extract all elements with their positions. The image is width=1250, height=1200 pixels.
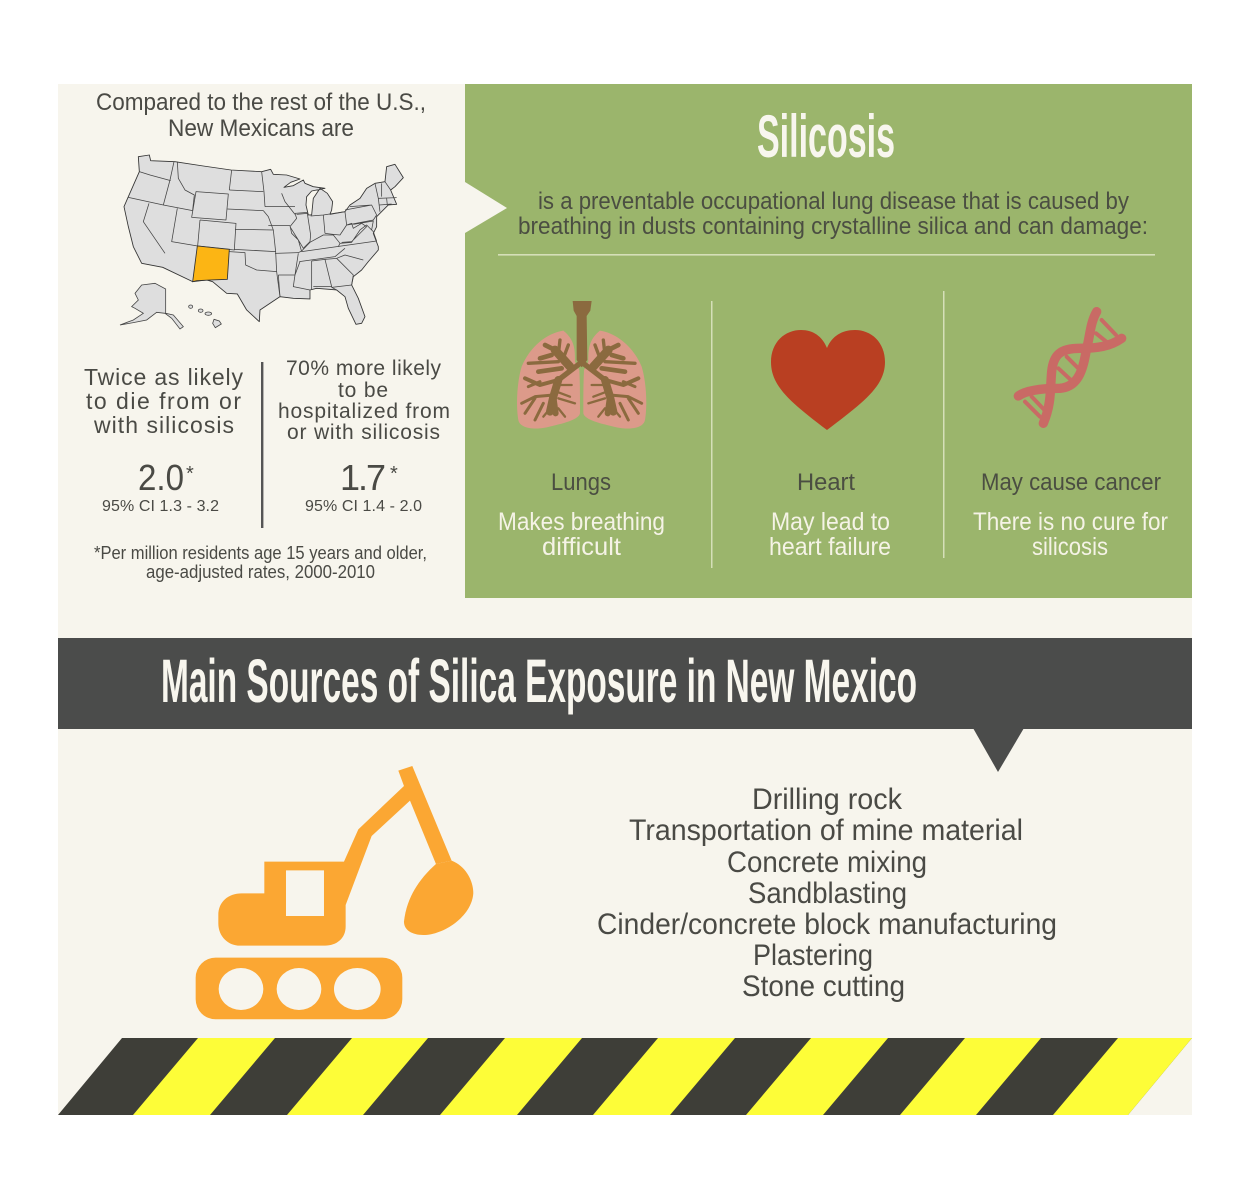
label: heart: May lead to: [771, 508, 890, 536]
cream background panel: [58, 84, 1192, 1115]
list: sources of exposure: Transportation of mine material: [629, 814, 1023, 847]
stat: 70% more likely: *: [390, 463, 398, 485]
stat: 70% more likely: [278, 357, 450, 515]
label: heart: Heart: [797, 469, 855, 496]
icon: lungs: [517, 301, 646, 428]
stat: twice as likely: Twice as likely: [84, 364, 244, 390]
list: sources of exposure: Cinder/concrete block manufacturing: [597, 908, 1057, 941]
stat: 70% more likely: 1.7: [340, 457, 386, 498]
banner: main sources: [58, 638, 1192, 772]
hazard stripes: [58, 1038, 1192, 1115]
stat: twice as likely: 2.0: [138, 457, 184, 498]
divider between stats: [261, 362, 263, 528]
label: heart: heart failure: [769, 533, 891, 561]
stat: twice as likely: to die from or: [86, 388, 241, 414]
label: lungs: [498, 469, 665, 561]
stat: twice as likely: with silicosis: [93, 412, 234, 438]
label: lungs: Makes breathing: [498, 508, 665, 536]
stat: 70% more likely: to be: [338, 379, 388, 402]
label: lungs: Lungs: [551, 469, 611, 496]
list: sources of exposure: Concrete mixing: [727, 846, 927, 879]
heading: Silicosis: Silicosis: [757, 103, 895, 170]
footnote: age-adjusted rates, 2000-2010: [146, 562, 375, 582]
label: cancer: May cause cancer: [981, 469, 1161, 496]
definition text: is a preventable occupational lung disease that is caused by: [538, 188, 1129, 215]
icon: DNA helix: [1018, 312, 1122, 423]
icon: heart: [771, 330, 885, 430]
label: cancer: [973, 469, 1168, 561]
stat: 70% more likely: hospitalized from: [278, 400, 450, 423]
definition text: [518, 188, 1148, 240]
intro text: [96, 89, 426, 142]
stat: 70% more likely: 95% CI 1.4 - 2.0: [305, 498, 422, 515]
map: United States with New Mexico highlighted: [120, 155, 403, 329]
Alaska and Hawaii: [120, 283, 221, 329]
intro text: New Mexicans are: [168, 115, 354, 142]
label: cancer: There is no cure for: [973, 508, 1168, 536]
stat: 70% more likely: 70% more likely: [286, 357, 442, 380]
list: sources of exposure: Stone cutting: [742, 970, 905, 1003]
New Mexico: [193, 246, 229, 282]
stat: 70% more likely: or with silicosis: [287, 421, 440, 444]
list: sources of exposure: [597, 783, 1057, 1003]
stat: twice as likely: 95% CI 1.3 - 3.2: [102, 498, 219, 515]
list: sources of exposure: Sandblasting: [748, 877, 907, 910]
panel: silicosis definition: [465, 84, 1192, 598]
label: lungs: difficult: [542, 533, 621, 561]
list: sources of exposure: Drilling rock: [752, 783, 903, 816]
list: sources of exposure: Plastering: [753, 939, 873, 972]
definition text: breathing in dusts containing crystalline silica and can damage:: [518, 213, 1148, 240]
icon: excavator: [196, 766, 473, 1019]
label: heart: [769, 469, 891, 561]
stat: twice as likely: [84, 364, 244, 515]
intro text: Compared to the rest of the U.S.,: [96, 89, 426, 116]
footnote: *Per million residents age 15 years and older,: [94, 543, 427, 563]
stat: twice as likely: *: [186, 463, 194, 485]
footnote: [94, 543, 427, 582]
label: cancer: silicosis: [1032, 533, 1108, 561]
